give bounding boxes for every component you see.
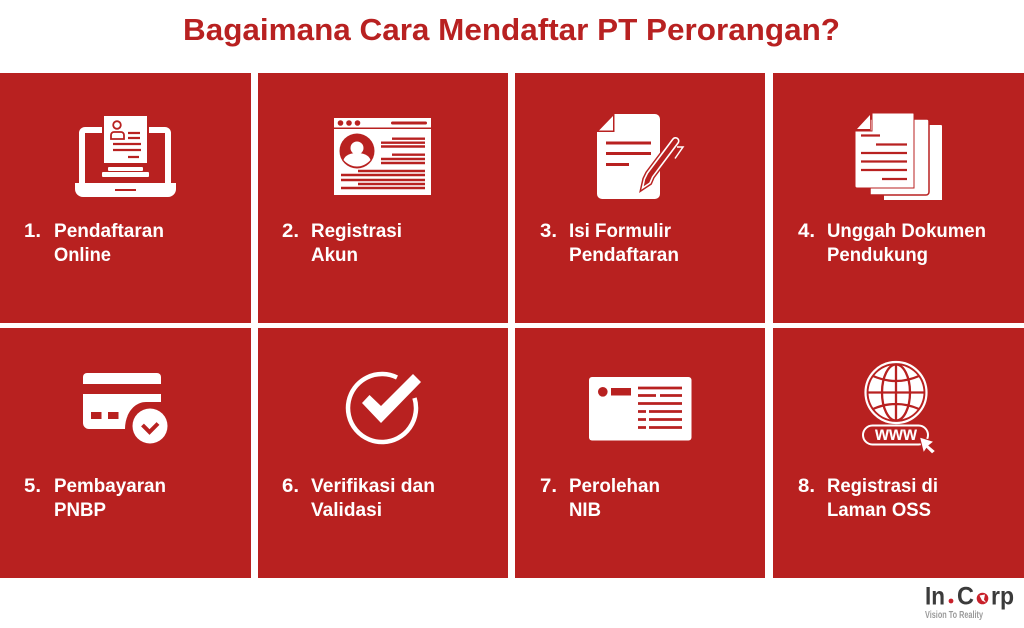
icon: document stack [855,113,942,200]
step 7 label: Perolehan [569,476,660,497]
step 7 label: NIB [569,500,601,521]
step 3 label [540,221,679,266]
step 8 label: Registrasi di [827,476,938,497]
logo: InCorp: Vision To Reality [925,610,983,621]
panel: step 2 registrasi akun [258,73,508,323]
step 3 label: Pendaftaran [569,245,679,266]
step 6 label: Validasi [311,500,382,521]
icon: payment card with check [83,373,168,444]
step 5 label: PNBP [54,500,106,521]
logo: InCorp: C [957,582,974,610]
icon: business identity card [589,377,692,440]
step 4 label [798,221,986,266]
step 7 label [540,476,660,521]
step 8 label [798,476,938,521]
step 5 label: 5. [24,476,41,497]
step 8 label: 8. [798,476,815,497]
step 4 label: 4. [798,221,815,242]
logo: InCorp: In [925,582,945,610]
step 1 label: Pendaftaran [54,221,164,242]
icon: globe with www and cursor: www [874,424,917,445]
step 4 label: Pendukung [827,245,928,266]
panel: step 4 unggah dokumen pendukung [773,73,1024,323]
step 2 label: 2. [282,221,299,242]
icon: check mark in circle [348,374,421,442]
step 1 label [24,221,164,266]
step 4 label: Unggah Dokumen [827,221,986,242]
step 1 label: Online [54,245,111,266]
step 6 label: Verifikasi dan [311,476,435,497]
title: Bagaimana Cara Mendaftar PT Perorangan? [183,12,840,47]
step 2 label: Akun [311,245,358,266]
icon: form and pen [597,114,683,199]
icon: globe with www and cursor [863,362,936,454]
step 6 label: 6. [282,476,299,497]
panel: step 5 pembayaran pnbp [0,328,251,578]
logo: InCorp [925,582,1014,621]
step 3 label: Isi Formulir [569,221,672,242]
panel: step 8 registrasi di laman oss [773,328,1024,578]
panel: step 7 perolehan nib [515,328,765,578]
step 5 label [24,476,166,521]
panel: step 3 isi formulir pendaftaran [515,73,765,323]
step 2 label: Registrasi [311,221,402,242]
step 2 label [282,221,402,266]
icon: web profile page [334,118,431,195]
step 3 label: 3. [540,221,557,242]
panel: step 1 pendaftaran online [0,73,251,323]
step 5 label: Pembayaran [54,476,166,497]
icon: laptop with document [75,116,176,197]
logo: InCorp: rp [991,582,1014,610]
step 7 label: 7. [540,476,557,497]
step 6 label [282,476,435,521]
step 1 label: 1. [24,221,41,242]
step 8 label: Laman OSS [827,500,931,521]
panel: step 6 verifikasi dan validasi [258,328,508,578]
